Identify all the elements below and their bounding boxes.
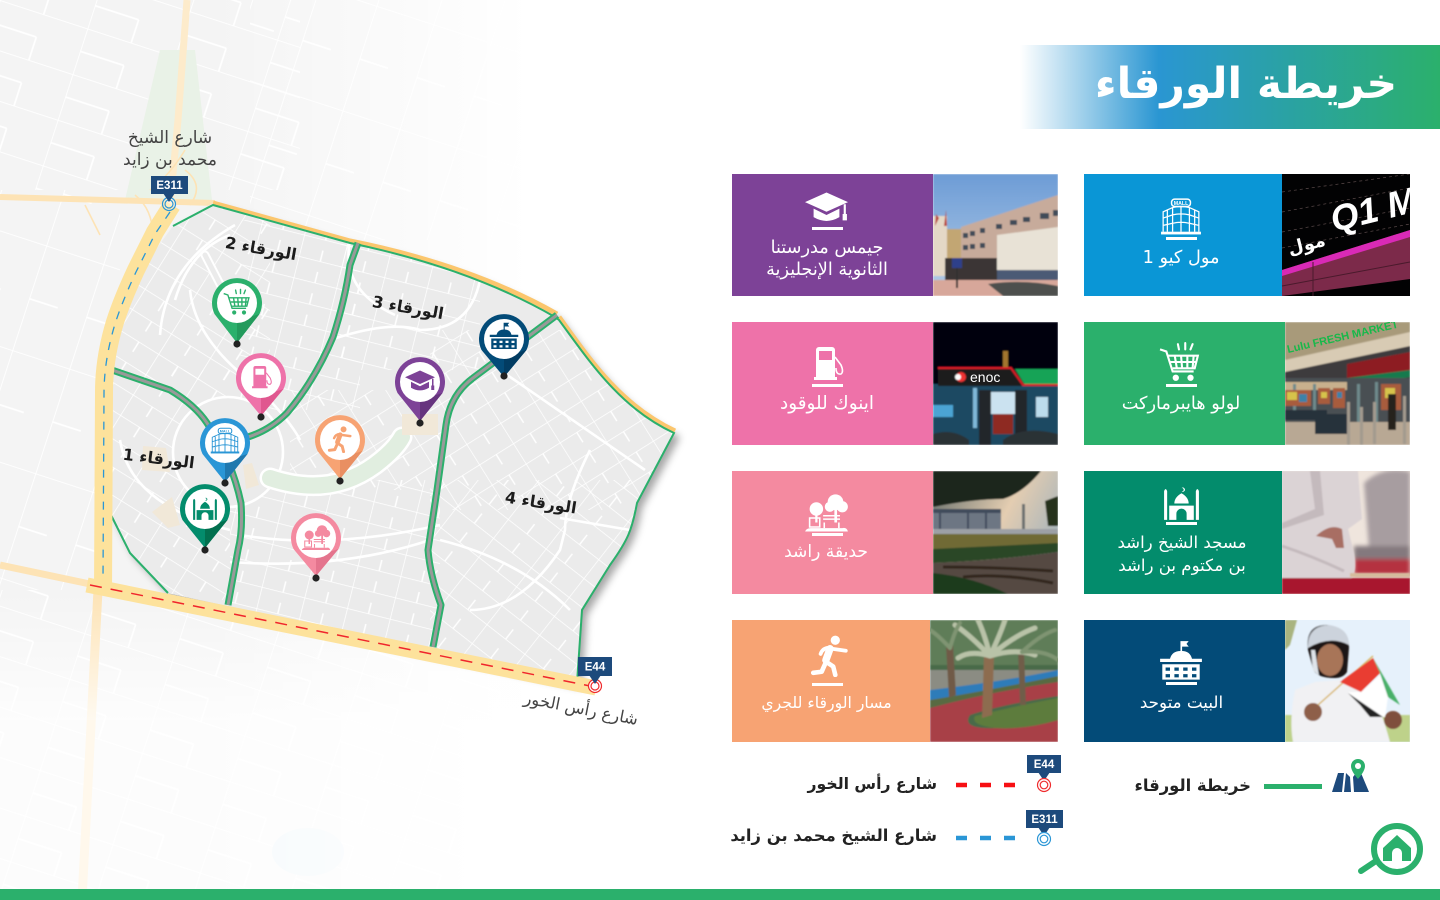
label: ward 4: الورقاء 4 [504,488,578,518]
label: ward 2: الورقاء 2 [224,233,298,264]
background streets [0,0,720,900]
road: E311 [103,205,172,592]
card: ENOC: اينوك للوقود [780,393,874,414]
marker: E44: E44 [585,662,606,674]
legend: Sheikh Mohammed Bin Zayed road: شارع الشيخ محمد بن زايد [730,826,937,845]
icon: civic building [1160,641,1202,680]
card: running track [732,620,1058,742]
highway boundary [110,203,675,683]
photo: Q1 mall sign: Q1 M [1326,178,1422,240]
photo: Q1 mall sign [1282,174,1422,296]
lots and park [142,414,438,528]
card: ENOC [732,322,1058,445]
photo: man praying [1282,471,1410,594]
label: E311 road name [123,128,217,170]
icon: cart [1160,343,1198,381]
photo: boy with flag [1285,620,1410,742]
label: ward 1: الورقاء 1 [122,445,196,472]
legend: Sheikh Mohammed Bin Zayed road [730,810,1063,846]
title banner [1020,45,1440,129]
pin: community centre [479,314,529,380]
icon: mall [1161,199,1201,234]
card: GEMS school: الثانوية الإنجليزية [766,260,888,280]
card: Lulu hypermarket: لولو هايبرماركت [1122,394,1240,414]
label: E311 road name: محمد بن زايد [123,150,217,170]
pin: mosque [180,484,230,554]
legend: Sheikh Mohammed Bin Zayed road: E311 [1031,814,1058,826]
photo: school [933,174,1058,296]
map [0,0,720,900]
pin: school [395,357,445,427]
footer bar [0,889,1440,900]
photo: petrol station: enoc [970,369,1000,385]
label: ward 3: الورقاء 3 [371,292,445,323]
card: mosque: مسجد الشيخ راشد [1117,533,1247,553]
internal roads [112,243,557,647]
marker: E311: E311 [156,180,183,192]
photo: supermarket: Lulu FRESH MARKET [1286,319,1400,356]
photo: palm track [930,620,1058,742]
pin: mall [200,418,250,487]
legend: district map [1134,759,1369,795]
photo: Q1 mall sign: مول [1286,230,1328,259]
district area [100,200,680,690]
legend: district map: خريطة الورقاء [1134,776,1251,795]
road: E44 [87,585,596,688]
icon: fuel pump [814,347,842,380]
card: Lulu hypermarket [1084,319,1410,445]
label: E44 road name: شارع رأس الخور [521,687,640,730]
card: GEMS school: جيمس مدرستنا [771,238,883,258]
icon: runner [813,636,846,675]
pin: running track [315,415,365,485]
photo: supermarket [1285,319,1410,445]
card: Q1 mall: مول كيو 1 [1143,248,1219,268]
label: E311 road name: شارع الشيخ [128,128,212,148]
marker: E44 [578,657,612,692]
legend: Ras Al Khor road: شارع رأس الخور [807,773,937,793]
card: Rashid park [732,471,1058,594]
card: GEMS school [732,174,1058,296]
circular and collector streets [120,225,645,610]
icon: park [805,494,848,532]
photo: park [933,471,1058,594]
pin: park [291,513,341,582]
title banner: خريطة الورقاء [1095,60,1397,109]
card: Q1 mall [1084,174,1422,296]
icon: graduation cap [805,192,848,221]
icon: map pin [1332,759,1369,792]
pin: hypermarket [212,278,262,348]
marker: E311 [151,176,188,210]
card: mosque: بن مكتوم بن راشد [1118,556,1246,576]
logo: home search [1361,826,1420,872]
pin: fuel station [236,353,286,421]
legend: Ras Al Khor road [807,755,1061,793]
card: community centre [1084,620,1410,742]
legend: Ras Al Khor road: E44 [1034,759,1055,771]
photo: petrol station [933,322,1058,445]
card: Rashid park: حديقة راشد [784,542,868,562]
card: running track: مسار الورقاء للجري [761,693,892,713]
card: community centre: البيت متوحد [1140,692,1223,712]
card: mosque [1084,470,1410,594]
icon: mosque [1164,488,1199,520]
